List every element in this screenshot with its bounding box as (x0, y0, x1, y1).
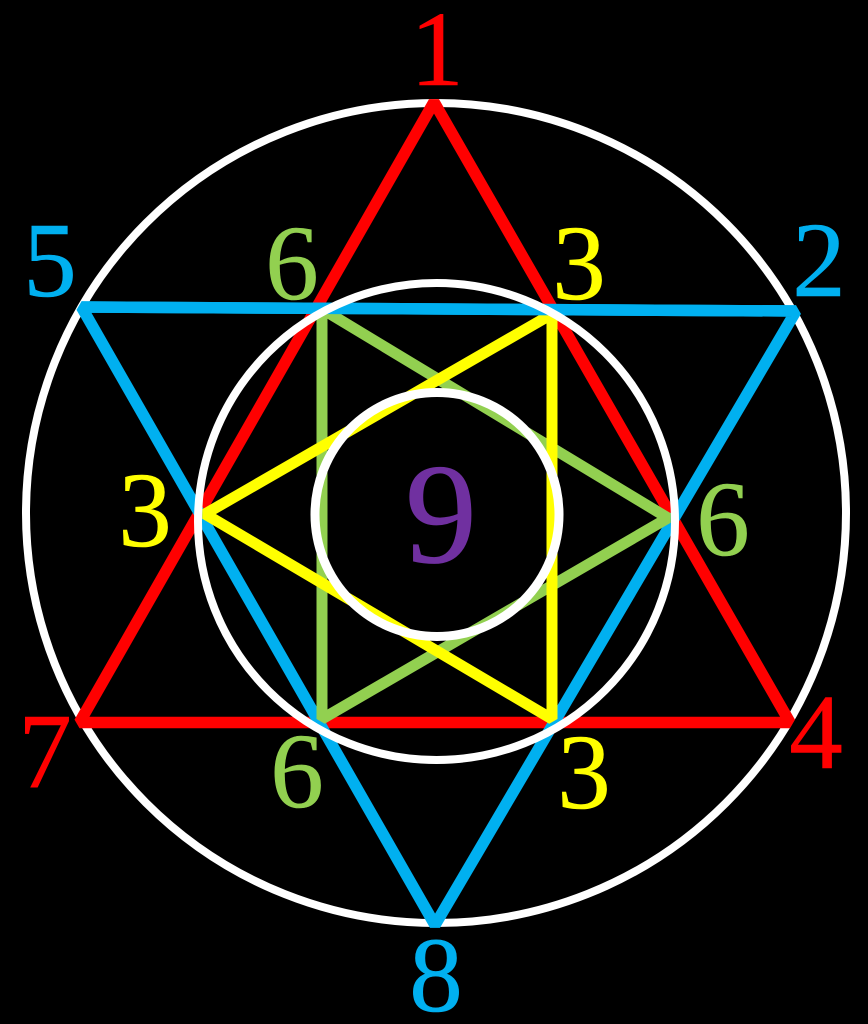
number 2: 2 (792, 202, 846, 320)
number 3 bottom: 3 (557, 714, 611, 832)
blue triangle (82, 307, 796, 925)
blue top edge overlay (82, 307, 796, 311)
outer white circle (26, 103, 846, 923)
number 6 right: 6 (696, 461, 750, 579)
number 9 center: 9 (405, 435, 477, 593)
number 7: 7 (18, 693, 72, 811)
yellow triangle (205, 314, 552, 719)
number 6 bottom: 6 (270, 713, 324, 831)
number 3 left: 3 (118, 452, 172, 570)
green triangle (322, 309, 668, 719)
number 6 top: 6 (265, 205, 319, 323)
red triangle (80, 102, 790, 722)
number 5: 5 (23, 202, 77, 320)
number 3 top: 3 (552, 205, 606, 323)
middle white circle (198, 283, 675, 760)
number 4: 4 (789, 674, 843, 792)
inner white circle (315, 392, 559, 636)
